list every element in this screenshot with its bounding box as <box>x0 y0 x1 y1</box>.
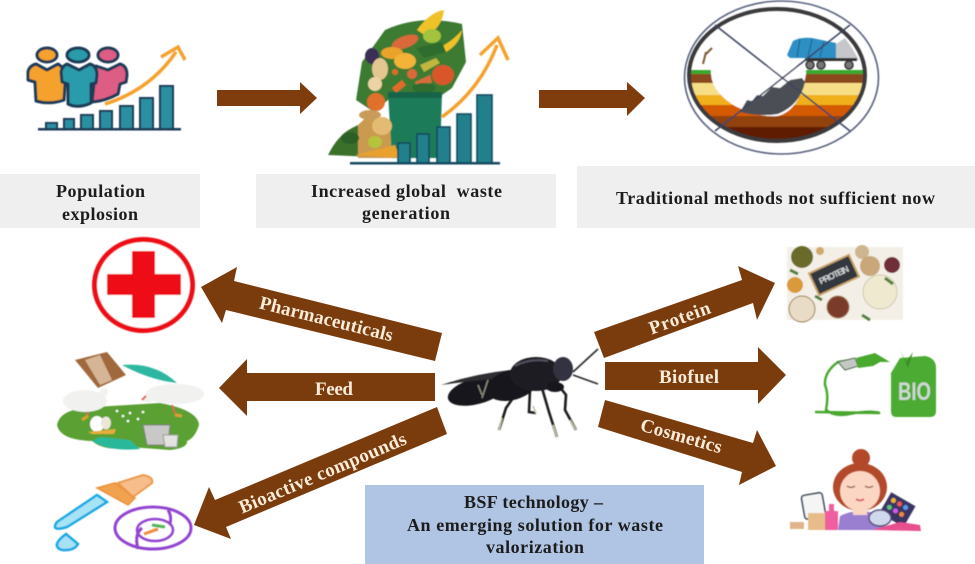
panel: increased global waste generation <box>256 174 556 228</box>
arrow: feed <box>219 359 435 416</box>
label: feed: Feed <box>315 379 353 400</box>
icon: biofuel can and pump <box>815 350 936 417</box>
panel: population explosion <box>0 174 200 228</box>
label: BSF technology caption: An emerging solution for waste <box>407 515 663 535</box>
label: increased global waste generation: Increased global waste <box>311 181 502 201</box>
icon: population growth <box>28 47 185 130</box>
chalkboard text: PROTEIN <box>817 264 851 286</box>
arrow: bioactive compounds <box>194 407 447 539</box>
icon: crossed-out landfill <box>684 1 878 154</box>
jerrycan label: BIO <box>898 378 931 406</box>
label: increased global waste generation: generation <box>362 203 450 223</box>
icon: black soldier fly <box>441 349 598 437</box>
label: population explosion: explosion <box>62 204 138 224</box>
icon: woman with cosmetics <box>790 449 921 531</box>
arrow: cosmetics <box>598 400 776 485</box>
panel: BSF technology <box>365 485 704 564</box>
arrow: pharmaceuticals <box>201 267 442 361</box>
label: BSF technology caption: valorization <box>486 537 584 557</box>
label: BSF technology caption: BSF technology – <box>464 492 604 512</box>
icon: animal feed <box>57 352 204 450</box>
arrow: biofuel <box>605 347 786 404</box>
icon: medical red cross <box>94 240 192 330</box>
label: cosmetics: Cosmetics <box>638 415 724 458</box>
icon: food waste bin and growth chart <box>328 10 508 164</box>
label: pharmaceuticals: Pharmaceuticals <box>257 293 395 346</box>
arrow: population to waste <box>217 82 317 114</box>
label: protein: Protein <box>646 298 714 339</box>
arrow: protein <box>594 266 775 358</box>
panel: traditional methods <box>577 166 975 228</box>
label: bioactive compounds: Bioactive compounds <box>236 429 410 518</box>
arrow: waste to traditional methods <box>539 82 645 116</box>
label: population explosion: Population <box>56 181 145 201</box>
label: traditional methods not sufficient now: Traditional methods not sufficient now <box>616 188 935 208</box>
label: biofuel: Biofuel <box>659 367 719 388</box>
image: protein foods <box>787 245 903 322</box>
icon: dropper and DNA <box>55 475 191 550</box>
